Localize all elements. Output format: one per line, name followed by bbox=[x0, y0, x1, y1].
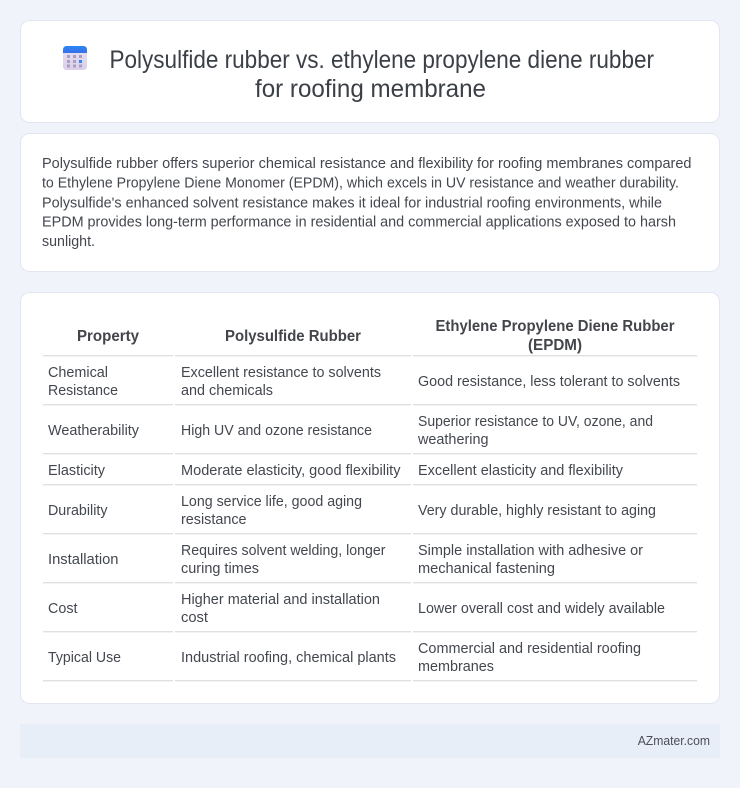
row: installation: mechanical fastening bbox=[418, 560, 555, 577]
summary text: to Ethylene Propylene Diene Monomer (EPDM), which excels in UV resistance and weather durability. bbox=[42, 174, 679, 192]
panel: title card bbox=[20, 20, 720, 122]
row: weatherability: High UV and ozone resistance bbox=[181, 422, 372, 439]
table header bbox=[77, 318, 674, 354]
row: chemical resistance: and chemicals bbox=[181, 382, 273, 399]
row: installation: curing times bbox=[181, 560, 259, 577]
row: cost: Higher material and installation bbox=[181, 591, 380, 608]
row: cost: cost bbox=[181, 609, 209, 626]
row: cost: Cost bbox=[48, 600, 78, 617]
row: weatherability: Superior resistance to UV, ozone, and bbox=[418, 413, 653, 430]
panel: summary bbox=[20, 134, 720, 272]
row: typical use: Typical Use bbox=[48, 649, 121, 666]
row: durability bbox=[48, 493, 656, 528]
icon: calendar bbox=[63, 46, 87, 70]
row: durability: Durability bbox=[48, 502, 108, 519]
row: weatherability: Weatherability bbox=[48, 422, 139, 439]
table header: (EPDM) bbox=[528, 337, 582, 354]
row: elasticity: Elasticity bbox=[48, 462, 105, 479]
summary text: EPDM provides long-term performance in residential and commercial applications exposed to harsh bbox=[42, 214, 676, 230]
summary text: Polysulfide rubber offers superior chemical resistance and flexibility for roofing membranes compared bbox=[42, 155, 692, 172]
row: durability: Long service life, good aging bbox=[181, 493, 362, 510]
row: chemical resistance: Good resistance, less tolerant to solvents bbox=[418, 373, 680, 390]
panel: comparison table bbox=[20, 292, 720, 704]
footer credit: AZmater.com bbox=[638, 734, 710, 748]
row: durability: Very durable, highly resistant to aging bbox=[418, 502, 656, 519]
row: installation: Simple installation with adhesive or bbox=[418, 542, 643, 559]
summary text bbox=[42, 155, 692, 250]
row: elasticity: Excellent elasticity and flexibility bbox=[418, 462, 623, 479]
row: installation bbox=[48, 542, 643, 577]
footer bar bbox=[20, 724, 720, 758]
row: typical use: Commercial and residential roofing bbox=[418, 640, 641, 657]
row: chemical resistance bbox=[48, 364, 680, 399]
row: chemical resistance: Chemical bbox=[48, 364, 108, 381]
row: typical use bbox=[48, 640, 641, 675]
title: Polysulfide rubber vs. ethylene propylene diene rubber bbox=[110, 47, 654, 74]
table header: Polysulfide Rubber bbox=[225, 328, 361, 345]
row: cost: Lower overall cost and widely available bbox=[418, 600, 665, 617]
row: typical use: Industrial roofing, chemical plants bbox=[181, 649, 396, 666]
table header: Property bbox=[77, 328, 139, 345]
title bbox=[110, 47, 654, 103]
row: durability: resistance bbox=[181, 511, 246, 528]
row: typical use: membranes bbox=[418, 658, 494, 675]
summary text: sunlight. bbox=[42, 233, 95, 250]
row: weatherability bbox=[48, 413, 653, 448]
row: chemical resistance: Resistance bbox=[48, 382, 118, 399]
row: chemical resistance: Excellent resistance to solvents bbox=[181, 364, 381, 381]
row: cost bbox=[48, 591, 665, 626]
summary text: Polysulfide's enhanced solvent resistance makes it ideal for industrial roofing environments, while bbox=[42, 194, 662, 212]
row: installation: Requires solvent welding, longer bbox=[181, 542, 386, 559]
title: for roofing membrane bbox=[255, 76, 486, 103]
row: weatherability: weathering bbox=[417, 431, 488, 448]
row: elasticity bbox=[48, 462, 623, 479]
table header: Ethylene Propylene Diene Rubber bbox=[436, 318, 674, 335]
row: installation: Installation bbox=[48, 551, 118, 568]
row: elasticity: Moderate elasticity, good flexibility bbox=[181, 462, 401, 479]
